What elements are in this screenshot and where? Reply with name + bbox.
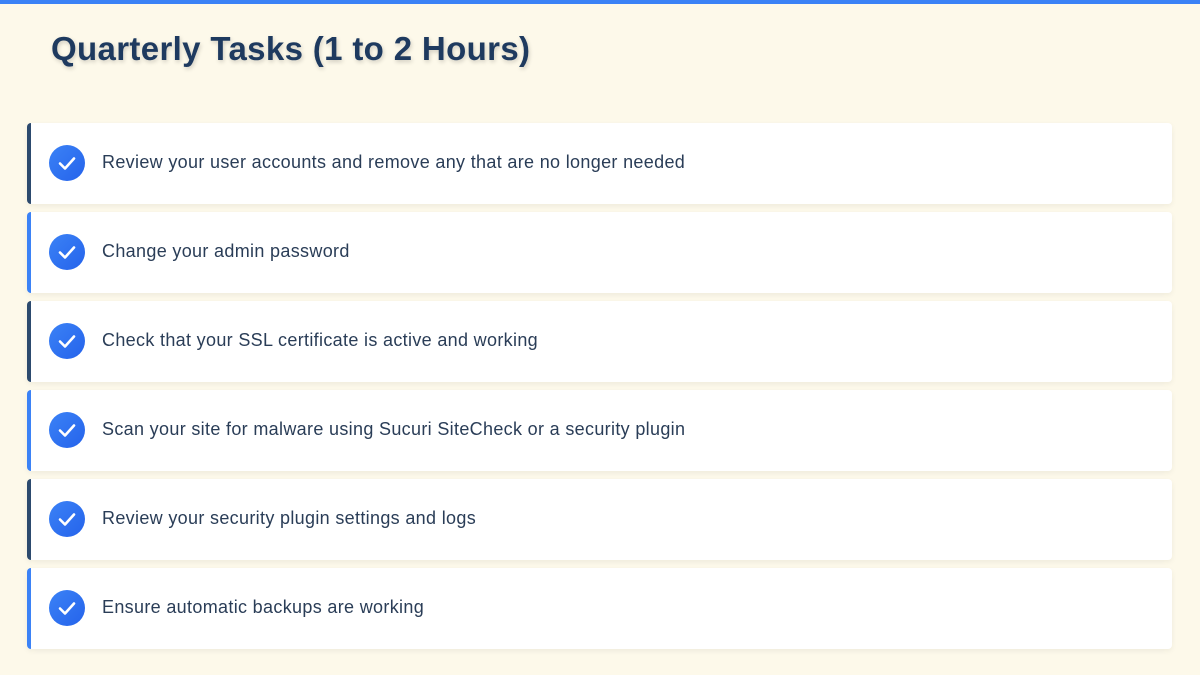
card: SSL xyxy=(27,301,1172,382)
card: user accounts xyxy=(27,123,1172,204)
text: Review your security plugin settings and logs xyxy=(102,508,476,528)
text: Scan your site for malware using Sucuri SiteCheck or a security plugin xyxy=(102,419,685,439)
text: Change your admin password xyxy=(102,241,350,261)
icon: check xyxy=(49,323,85,359)
icon: check xyxy=(49,145,85,181)
icon: check xyxy=(49,590,85,626)
title: Quarterly Tasks (1 to 2 Hours) xyxy=(51,30,530,67)
card: backups xyxy=(27,568,1172,649)
text: Check that your SSL certificate is active and working xyxy=(102,330,538,350)
icon: check xyxy=(49,234,85,270)
card: malware scan xyxy=(27,390,1172,471)
text: Ensure automatic backups are working xyxy=(102,597,424,617)
icon: check xyxy=(49,412,85,448)
icon: check xyxy=(49,501,85,537)
text: Review your user accounts and remove any that are no longer needed xyxy=(102,152,685,172)
card: admin password xyxy=(27,212,1172,293)
card: plugin settings xyxy=(27,479,1172,560)
